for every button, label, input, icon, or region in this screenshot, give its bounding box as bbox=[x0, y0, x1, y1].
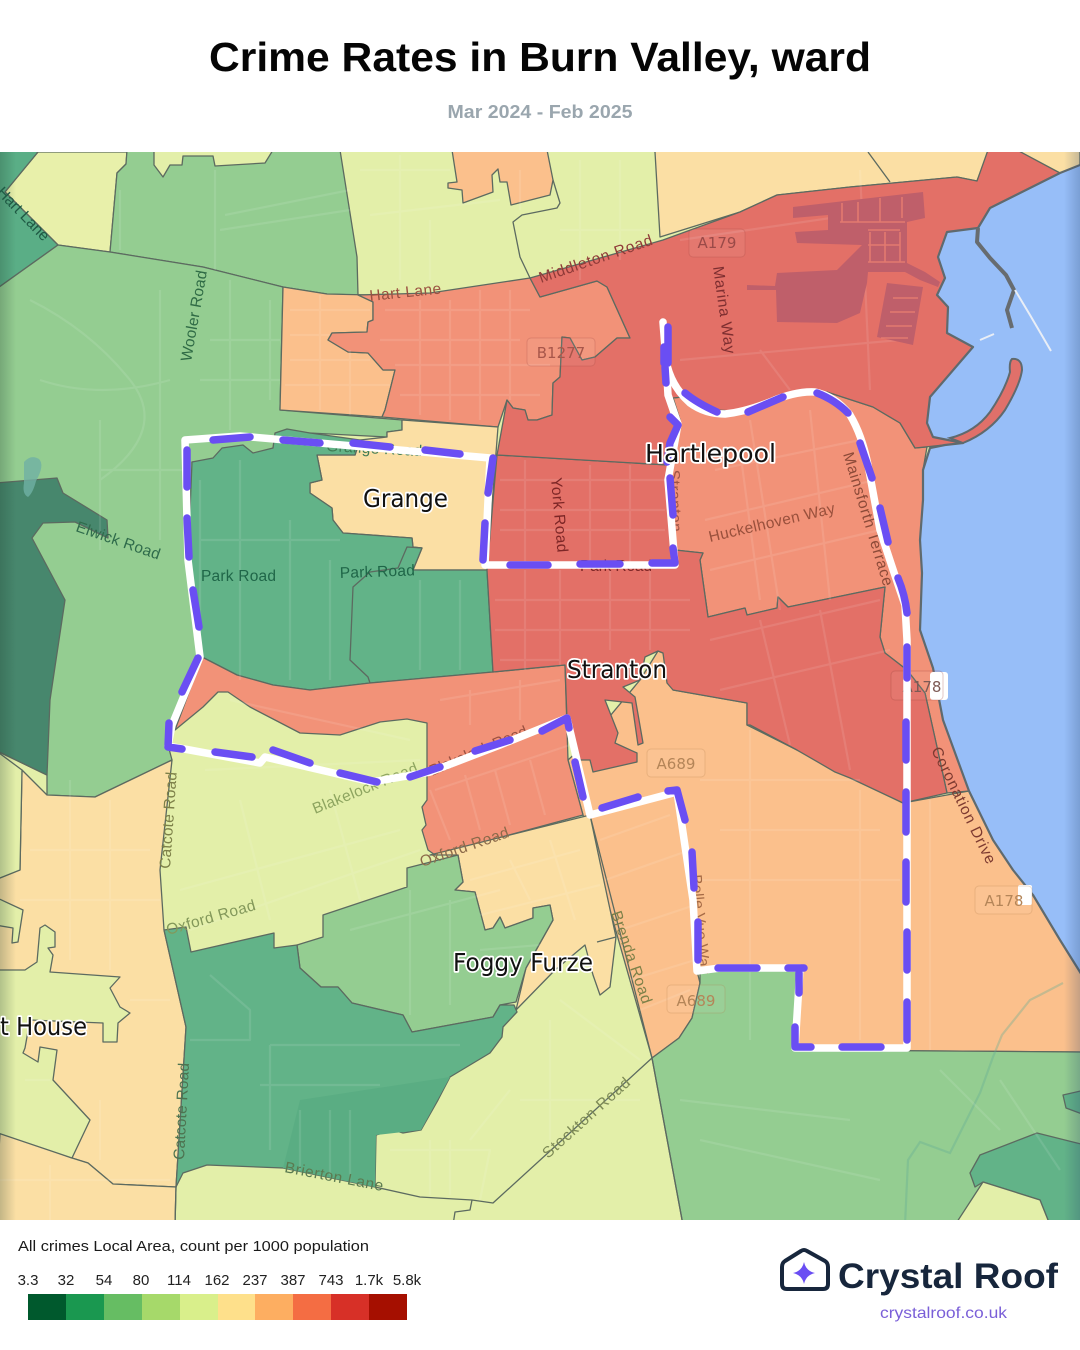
label: Blakelock Road west: Blakelock Road bbox=[310, 760, 420, 818]
label: Oxford Road west: Oxford Road bbox=[164, 897, 258, 939]
boundary casing bbox=[168, 322, 907, 1048]
area: coastal salmon bbox=[668, 392, 969, 793]
legend values bbox=[18, 1272, 422, 1289]
icon: house with star bbox=[782, 1250, 828, 1289]
legend bbox=[18, 1239, 422, 1320]
label: Belle Vue Way: Belle Vue Way bbox=[687, 874, 713, 975]
area: Hart Lane salmon bbox=[328, 278, 630, 427]
place labels bbox=[0, 439, 776, 1041]
legend values: 54 bbox=[96, 1272, 112, 1289]
shield: A689 north: A689 bbox=[657, 755, 695, 773]
label: Oxford Road east: Oxford Road bbox=[418, 824, 511, 871]
label: York Road: York Road bbox=[547, 477, 570, 553]
area: south-east small mid green bbox=[1063, 1090, 1080, 1115]
area: north-west teal bbox=[0, 152, 58, 286]
area: north-west pale yellow bbox=[5, 152, 127, 252]
area: small west yellow-green bbox=[0, 897, 23, 943]
label: Park Road east: Park Road bbox=[580, 558, 652, 575]
sea water bbox=[920, 163, 1080, 980]
street network bbox=[0, 155, 1060, 1220]
brand url: crystalroof.co.uk bbox=[880, 1305, 1008, 1322]
label: Coronation Drive: Coronation Drive bbox=[927, 744, 999, 867]
area: south pale orange bbox=[430, 815, 616, 1010]
shield: A178 north: A178 bbox=[903, 678, 941, 696]
label: Hart Lane: Hart Lane bbox=[369, 281, 442, 305]
label: Catcote Road north: Catcote Road bbox=[157, 771, 181, 869]
area: south-east mid green bbox=[970, 1133, 1080, 1225]
legend values: 237 bbox=[242, 1272, 268, 1289]
subtitle: date range: Mar 2024 - Feb 2025 bbox=[448, 102, 632, 122]
label: Brierton Lane: Brierton Lane bbox=[283, 1159, 385, 1195]
legend colour scale bbox=[28, 1294, 407, 1320]
breakwater bbox=[977, 228, 1014, 328]
label: Catcote Road south: Catcote Road bbox=[171, 1062, 193, 1160]
area: north light green bbox=[110, 150, 358, 295]
area: Brierton mid green bbox=[164, 927, 517, 1187]
marina pontoons bbox=[840, 197, 918, 338]
area: west orange bbox=[280, 287, 395, 417]
shield: A179 bbox=[689, 229, 745, 257]
area: west dark green bbox=[0, 478, 108, 775]
darker streets block bbox=[283, 1077, 450, 1187]
area: far west yellow-green bbox=[0, 750, 22, 880]
brand logo bbox=[782, 1250, 1058, 1322]
legend values: 5.8k bbox=[393, 1272, 422, 1289]
shield: A178 north bbox=[891, 671, 943, 700]
pond bbox=[24, 457, 41, 497]
place: Stranton: Stranton bbox=[567, 655, 667, 684]
place: West House fragment: t House bbox=[0, 1012, 87, 1041]
area: south-east yellow-green bbox=[958, 1181, 1049, 1220]
area: Park mid green bbox=[188, 429, 493, 690]
shield: A179: A179 bbox=[698, 234, 736, 252]
shield: A689 south: A689 bbox=[677, 992, 715, 1010]
title: Crime Rates in Burn Valley, ward bbox=[209, 34, 871, 80]
road shields bbox=[527, 229, 1032, 1013]
pier lines bbox=[980, 290, 1051, 351]
area: west light green bbox=[0, 245, 402, 797]
place: Foggy Furze: Foggy Furze bbox=[453, 948, 593, 977]
label: Grange Road: Grange Road bbox=[326, 438, 423, 460]
legend title: All crimes Local Area, count per 1000 population bbox=[18, 1239, 369, 1255]
label: Park Road middle: Park Road bbox=[340, 562, 415, 582]
spit bbox=[950, 359, 1022, 443]
ward boundary: Burn Valley bbox=[168, 322, 907, 1048]
area: Stranton salmon bbox=[175, 657, 583, 855]
legend values: 114 bbox=[167, 1272, 191, 1289]
shield: B1277 bbox=[527, 338, 595, 366]
marina basins bbox=[747, 192, 940, 345]
shield: A178 south: A178 bbox=[985, 892, 1023, 910]
brand name: Crystal Roof bbox=[838, 1257, 1058, 1296]
area: south light green bbox=[652, 969, 1080, 1225]
label: Wooler Road: Wooler Road bbox=[178, 269, 211, 363]
label: Park Road west: Park Road bbox=[201, 568, 276, 585]
park ward inner boundary bbox=[350, 547, 422, 683]
legend values: 162 bbox=[204, 1272, 230, 1289]
label: Marina Way: Marina Way bbox=[709, 265, 738, 355]
area: West View yellow-green bbox=[0, 925, 130, 1158]
area: Foggy Furze light green bbox=[297, 855, 553, 1032]
label: Stranton road: Stranton bbox=[665, 470, 684, 532]
marina: main basin bbox=[747, 192, 940, 323]
area: north-east pale orange bbox=[654, 152, 1080, 238]
label: Mainsforth Terrace: Mainsforth Terrace bbox=[839, 450, 896, 588]
shield: A178 white tab bbox=[930, 672, 948, 700]
legend values: 743 bbox=[318, 1272, 344, 1289]
place: Grange: Grange bbox=[363, 484, 448, 513]
area: north orange block bbox=[448, 150, 553, 205]
area: northern red bbox=[497, 150, 1060, 465]
faint stream bbox=[905, 983, 1063, 1225]
place: Hartlepool: Hartlepool bbox=[645, 439, 776, 468]
shield: A689 north bbox=[647, 749, 705, 777]
shield: A178 south white tab bbox=[1018, 885, 1032, 905]
shield: B1277: B1277 bbox=[537, 344, 585, 362]
label: Stockton Road: Stockton Road bbox=[539, 1074, 634, 1162]
area: south-west block pale orange bbox=[0, 1132, 176, 1225]
area: south-east orange bbox=[568, 651, 1080, 1058]
road labels bbox=[0, 184, 999, 1195]
legend values: 1.7k bbox=[355, 1272, 384, 1289]
boundaries: southern lines bbox=[175, 152, 890, 1225]
legend values: 80 bbox=[133, 1272, 149, 1289]
shield: A689 south bbox=[667, 985, 725, 1013]
label: Elwick Road: Elwick Road bbox=[74, 519, 162, 563]
area: Grange pale orange bbox=[310, 420, 498, 570]
label: Brenda Road: Brenda Road bbox=[607, 909, 655, 1006]
vignette bbox=[0, 152, 16, 1220]
boundaries: northern yellow-green wards bbox=[513, 180, 560, 278]
area: central red bbox=[487, 455, 947, 803]
legend values: 3.3 bbox=[18, 1272, 38, 1289]
legend values: 387 bbox=[280, 1272, 306, 1289]
marina: east basin bbox=[877, 283, 923, 345]
shield: A178 south bbox=[975, 886, 1032, 914]
legend values: 32 bbox=[58, 1272, 74, 1289]
label: Blakelock Road east: Blakelock Road bbox=[427, 723, 530, 780]
sea bbox=[920, 163, 1080, 980]
boundary dashes bbox=[168, 327, 907, 1047]
label: Middleton Road: Middleton Road bbox=[537, 232, 655, 287]
area: west pale orange bbox=[0, 760, 186, 1225]
label: Huckelhoven Way: Huckelhoven Way bbox=[707, 500, 837, 546]
